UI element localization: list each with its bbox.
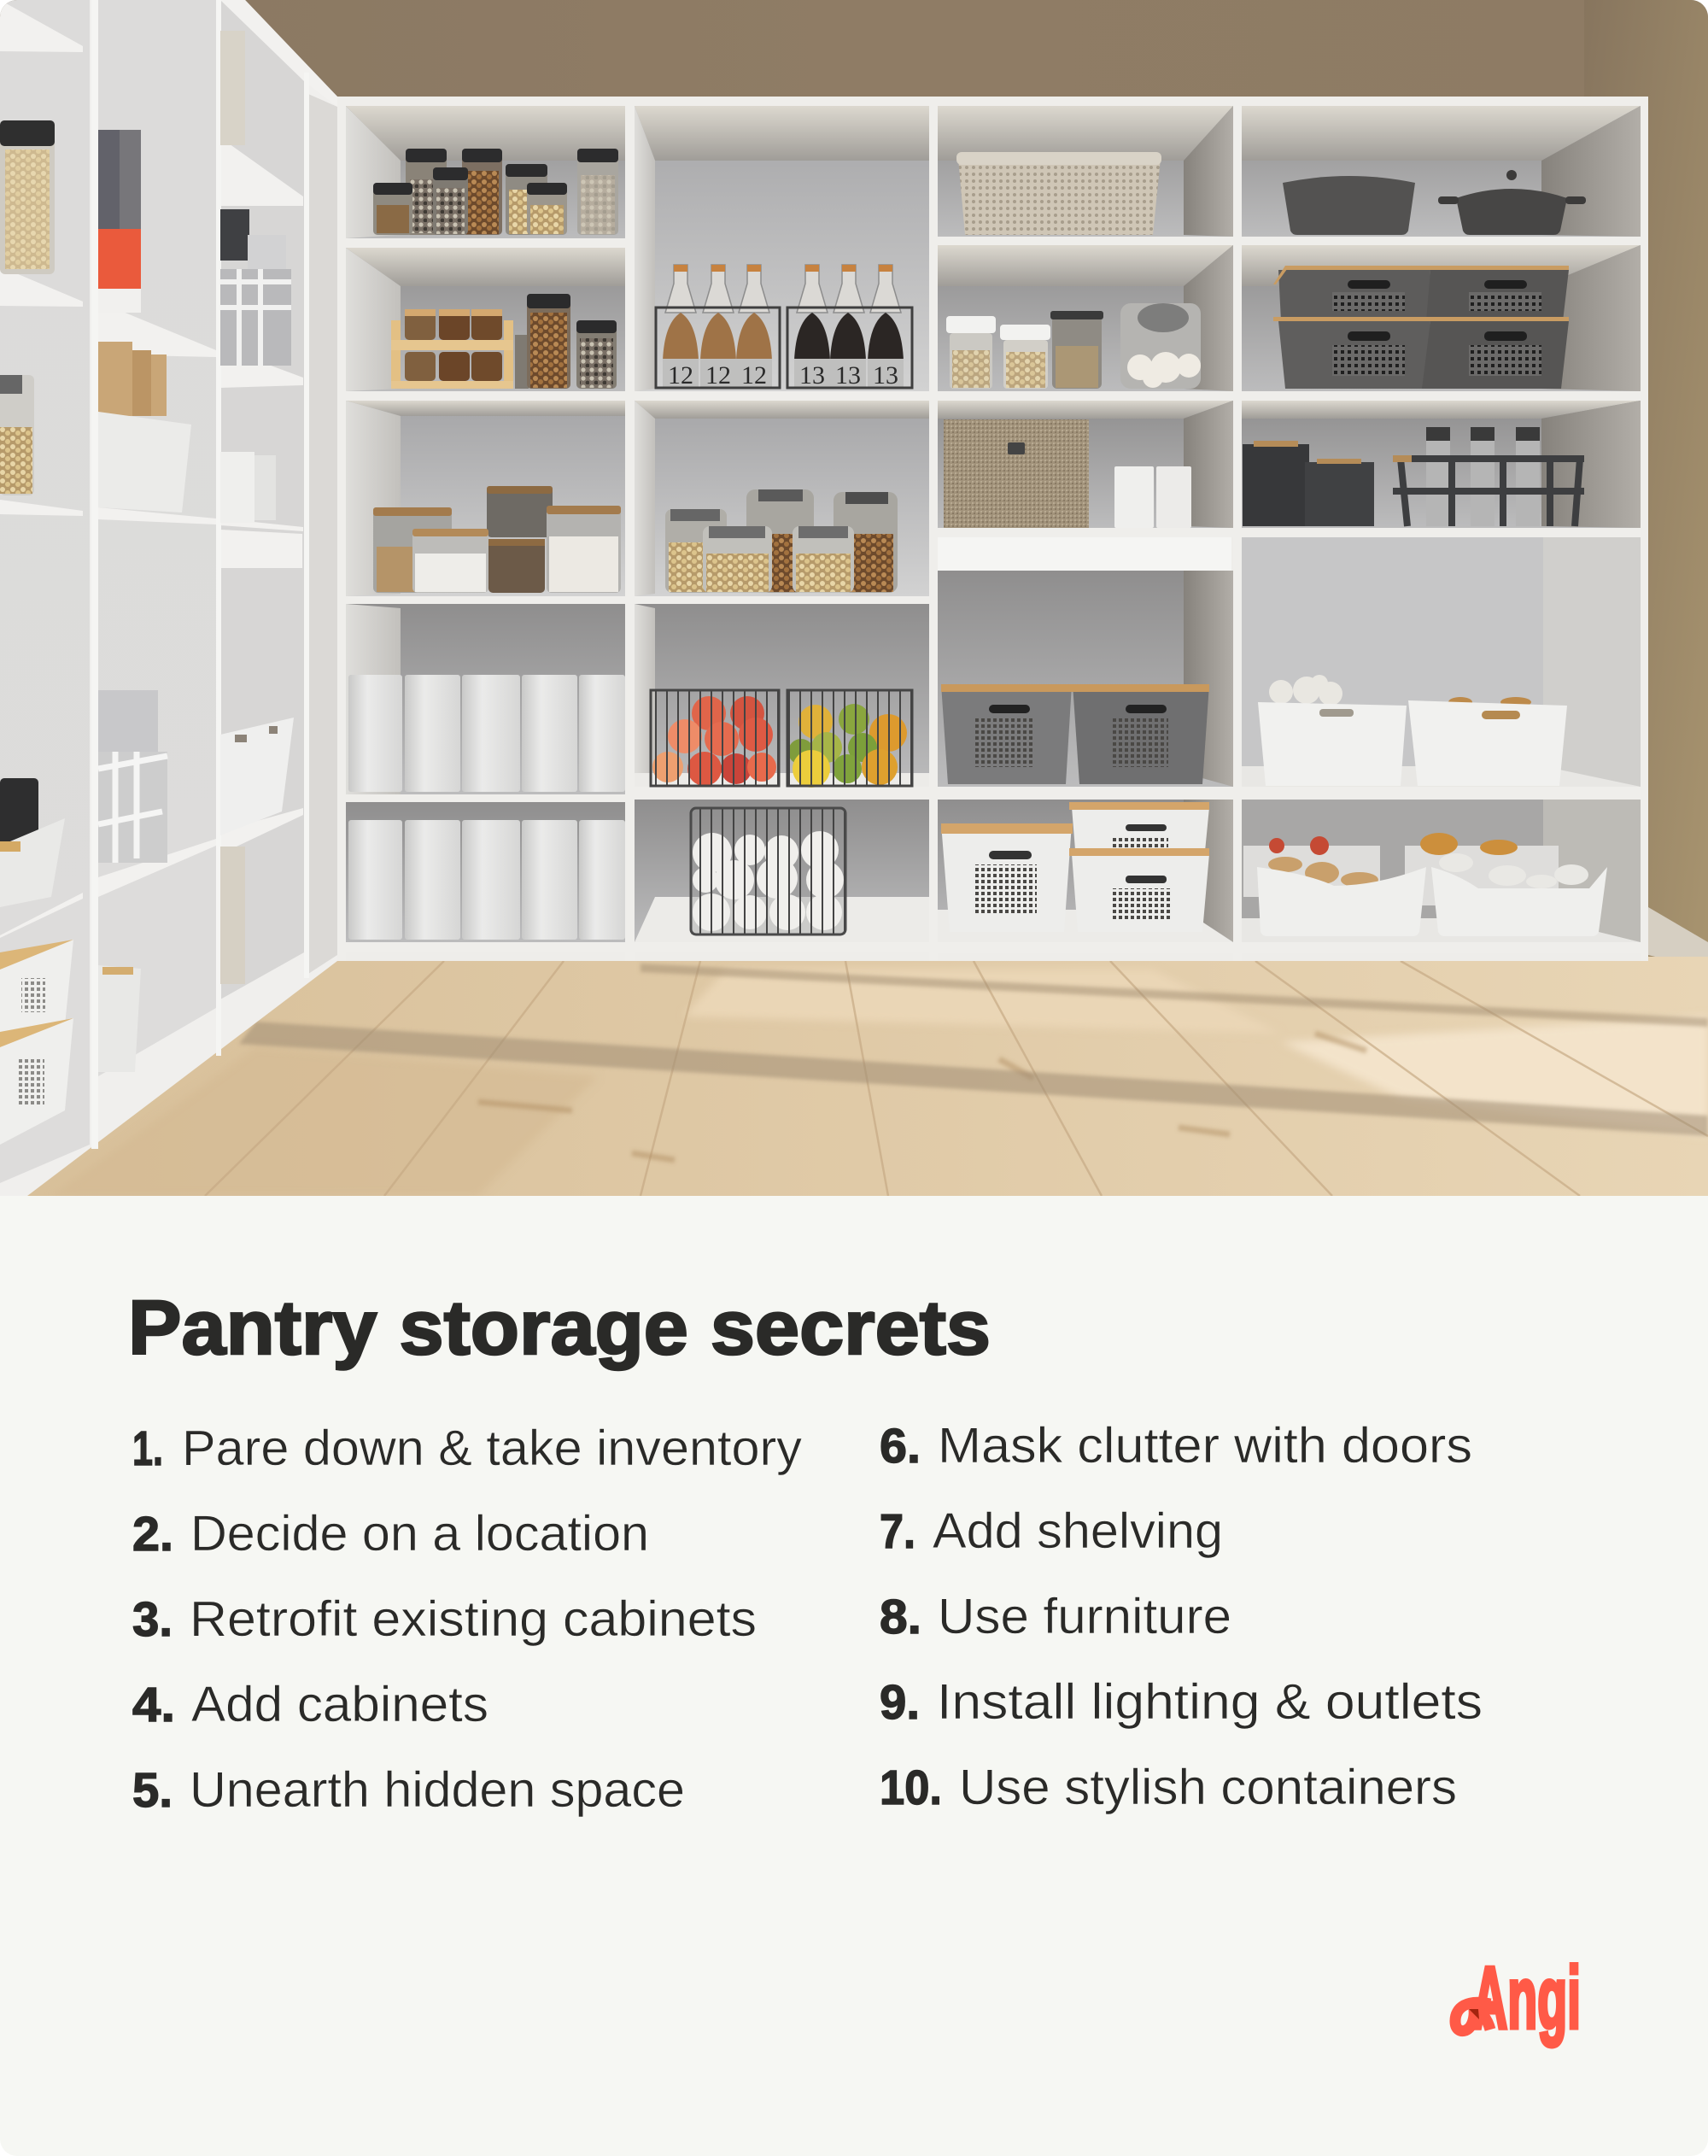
labelled bottles in wire baskets: 12 [741, 361, 767, 390]
list: tips one to five: 3. [132, 1592, 173, 1647]
list: tips six to ten: Mask clutter with doors [938, 1418, 1472, 1473]
white bins with garlic and onions [1258, 675, 1567, 786]
cast iron pots [1283, 170, 1586, 235]
grey perforated baskets [941, 684, 1209, 784]
column 1 cells [346, 106, 625, 942]
logo: Angi [1455, 1948, 1581, 2047]
glass jars with snacks [665, 489, 898, 593]
list: tips six to ten: 8. [880, 1590, 921, 1644]
list: tips one to five: 5. [132, 1763, 173, 1818]
list: tips six to ten: 9. [880, 1675, 920, 1730]
photo: organized pantry shelves [0, 0, 1708, 1196]
list: tips six to ten: 7. [880, 1504, 915, 1559]
right side wall [1584, 0, 1708, 974]
logo: Angi: Angi [1472, 1948, 1581, 2047]
list: tips one to five: Unearth hidden space [190, 1762, 685, 1818]
heading: Pantry storage secrets [128, 1286, 991, 1371]
labelled bottles in wire baskets: 13 [799, 361, 825, 390]
labelled bottles in wire baskets: 12 [668, 361, 693, 390]
baseboard [1648, 907, 1708, 970]
list: tips one to five: Retrofit existing cabinets [190, 1591, 757, 1647]
labelled bottles in wire baskets: 13 [873, 361, 898, 390]
list: tips six to ten: 10. [880, 1761, 942, 1815]
main shelving unit frame [337, 97, 1648, 961]
wooden spice rack and jars [391, 294, 617, 389]
list: tips one to five: 4. [132, 1678, 175, 1732]
labelled bottles in wire baskets [656, 265, 912, 390]
list: tips one to five: 1. [132, 1421, 163, 1476]
white perforated baskets [941, 802, 1209, 932]
burlap box and white canisters [944, 419, 1191, 528]
canisters with wooden lids [373, 486, 621, 593]
list: tips one to five: Pare down & take inventory [182, 1421, 802, 1476]
labelled bottles in wire baskets: 13 [835, 361, 861, 390]
beige woven basket [956, 152, 1161, 235]
list: tips six to ten: Use furniture [938, 1589, 1231, 1644]
column 3 cells [938, 106, 1233, 942]
list: tips one to five [132, 1421, 802, 1818]
column 4 cells [1242, 106, 1641, 942]
storage jars and garlic jar [946, 303, 1201, 389]
left shelving unit [0, 0, 337, 1196]
dark canisters and bottle rack [1243, 427, 1584, 526]
list: tips six to ten: Install lighting & outlets [937, 1674, 1483, 1730]
list: tips one to five: Decide on a location [190, 1506, 649, 1561]
wire basket of apples [651, 690, 779, 786]
list: tips six to ten [880, 1418, 1483, 1815]
left unit items [0, 31, 294, 1145]
wooden floor [17, 957, 1708, 1196]
labelled bottles in wire baskets: 12 [705, 361, 731, 390]
wire basket of citrus [787, 690, 912, 788]
left unit shelves [0, 0, 337, 938]
list: tips six to ten: Add shelving [933, 1503, 1223, 1559]
wire basket of garlic [691, 808, 845, 934]
list: tips one to five: Add cabinets [191, 1677, 488, 1732]
low bins with potatoes and garlic [1243, 833, 1607, 936]
column 2 cells [635, 106, 929, 942]
shelf frame boards [337, 97, 1648, 961]
back wall [0, 0, 1708, 974]
text panel [128, 1286, 1581, 2048]
list: tips one to five: 2. [132, 1507, 173, 1561]
jars: top shelf column 1 [373, 149, 618, 235]
white paper towel rolls [348, 675, 625, 940]
dark grey lidded baskets [1273, 266, 1569, 389]
list: tips six to ten: Use stylish containers [959, 1760, 1457, 1815]
list: tips six to ten: 6. [880, 1419, 921, 1473]
